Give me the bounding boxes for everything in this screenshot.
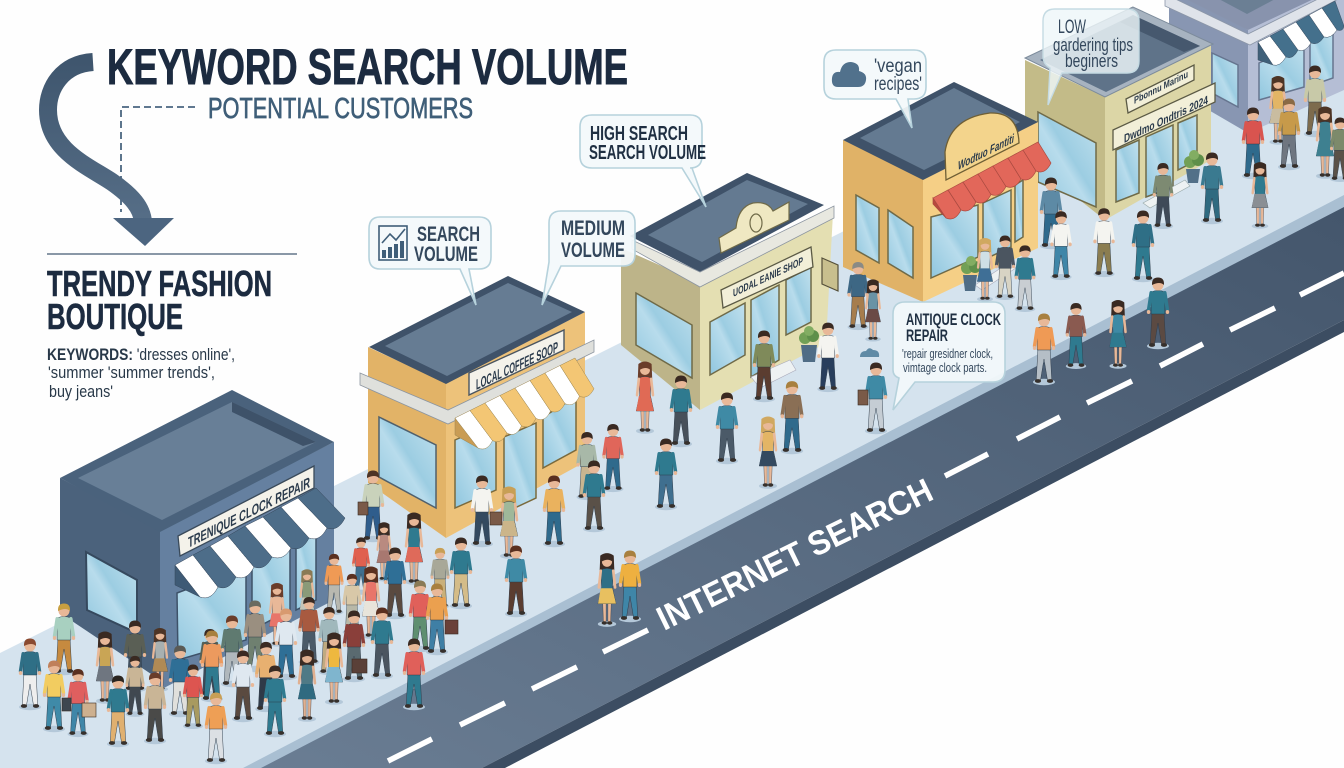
callout: high search volume: HIGH SEARCH <box>590 123 688 145</box>
gable ornament <box>719 202 789 253</box>
sign: lower store 5: Dwdmo Ondtris 2024 <box>1124 93 1208 146</box>
curb <box>243 195 1344 768</box>
sign: upper store 5 <box>1126 65 1194 113</box>
icon: cloud <box>832 62 866 87</box>
road label: INTERNET SEARCH <box>651 472 939 638</box>
divider rule <box>47 253 297 255</box>
subtitle: POTENTIAL CUSTOMERS <box>208 93 473 125</box>
plant <box>799 326 819 362</box>
callout: antique clock repair <box>893 302 1005 410</box>
sign: upper store 5: Pbonnu Marinu <box>1134 69 1188 107</box>
plant <box>961 256 981 291</box>
arched sign: Wodtuo Fantiti <box>958 131 1014 173</box>
sign: boutique: TRENIQUE CLOCK REPAIR <box>188 475 310 552</box>
awning: boutique <box>175 488 345 598</box>
callout: low gardening: LOW <box>1058 17 1086 38</box>
awning: coffee <box>455 358 594 449</box>
keyword list: buy jeans' <box>49 382 113 401</box>
store 3: tan <box>621 173 838 410</box>
heading: store name: BOUTIQUE <box>47 296 183 337</box>
roof <box>630 173 824 272</box>
heading: store name: TRENDY FASHION <box>47 263 272 304</box>
arched sign <box>945 113 1019 180</box>
callout: low gardening <box>1043 9 1139 105</box>
store 6: blue-grey, top right <box>1165 0 1344 133</box>
hanging sign <box>822 258 838 291</box>
callout: antique clock repair: REPAIR <box>906 326 948 345</box>
title: KEYWORD SEARCH VOLUME <box>107 39 628 95</box>
roof <box>60 390 334 532</box>
customers: crowd at the fashion boutique <box>19 390 868 764</box>
callout: vegan recipes: 'vegan <box>874 56 922 77</box>
roof <box>843 82 1038 180</box>
callout: antique clock repair: 'repair gresidner clock, <box>902 347 993 361</box>
shopping bags <box>62 390 868 717</box>
sign: store 3: UODAL EANIE SHOP <box>733 255 803 300</box>
awning: red <box>933 142 1051 219</box>
keyword list: KEYWORDS: 'dresses online', <box>47 345 235 364</box>
sign: coffee: LOCAL COFFEE SOOP <box>476 339 558 394</box>
icon: bar chart <box>379 226 407 260</box>
sign: store 3 <box>721 247 813 308</box>
arrow: curved down to boutique <box>48 62 174 246</box>
icon: small blue cloud on pavement <box>860 348 879 357</box>
store 2: coffee shop <box>360 276 594 538</box>
customers: upper street <box>576 66 1344 627</box>
dashed connector <box>121 107 195 212</box>
callout: medium volume: MEDIUM <box>561 217 625 240</box>
heading: store name <box>47 263 272 337</box>
callout: medium volume: VOLUME <box>561 239 625 262</box>
callout: high search volume: SEARCH VOLUME <box>589 142 706 164</box>
keyword list: 'summer 'summer trends', <box>48 363 215 382</box>
callout: antique clock repair: vimtage clock parts. <box>903 361 987 375</box>
sign: boutique <box>178 466 314 556</box>
keyword list <box>47 345 235 401</box>
plant <box>1184 150 1204 183</box>
store 4: orange <box>843 82 1051 302</box>
callout: medium volume <box>542 211 635 305</box>
callout: low gardening: gardering tips <box>1053 35 1133 55</box>
callout: search volume: SEARCH <box>417 223 480 246</box>
lane dashes <box>388 273 1344 761</box>
callout: search volume: VOLUME <box>414 243 478 266</box>
store 5: olive <box>1025 7 1215 220</box>
callout: antique clock repair: ANTIQUE CLOCK <box>906 310 1001 329</box>
roof <box>369 276 585 384</box>
callout: low gardening: beginers <box>1065 51 1118 71</box>
store 1: navy fashion boutique <box>60 390 345 690</box>
sign: lower store 5 <box>1113 83 1215 150</box>
awning: store 6 <box>1258 1 1344 65</box>
callout: search volume <box>369 217 491 305</box>
sign: coffee <box>469 330 564 395</box>
roof <box>1025 7 1213 97</box>
callout: high search volume <box>580 115 706 207</box>
callout: vegan recipes: recipes' <box>874 74 922 95</box>
callout: vegan recipes <box>824 50 926 128</box>
